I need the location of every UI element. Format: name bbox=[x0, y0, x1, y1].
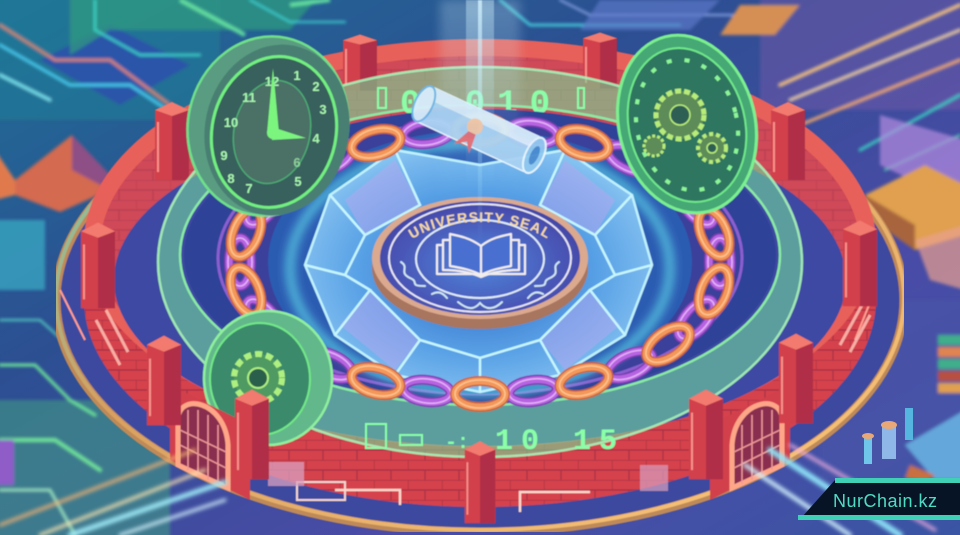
front wall pillars and gates bbox=[147, 334, 813, 523]
seal lettering: UNIVERSITY SEAL bbox=[407, 211, 548, 239]
clock numerals: 5 bbox=[294, 174, 302, 189]
light streams bottom right bbox=[745, 445, 935, 535]
watermark badge bbox=[798, 478, 960, 520]
red fortress wall bbox=[60, 39, 876, 512]
green translucent ring bbox=[158, 67, 802, 457]
diploma scroll bbox=[405, 83, 551, 183]
clock numerals: 7 bbox=[245, 181, 253, 196]
back wall pillars bbox=[81, 32, 877, 308]
clock numerals: 9 bbox=[220, 148, 228, 163]
disc: gears right bbox=[599, 20, 775, 228]
watermark badge: NurChain.kz bbox=[833, 491, 938, 511]
university seal bbox=[371, 196, 589, 330]
clock numerals: 1 bbox=[293, 68, 301, 83]
clock numerals: 12 bbox=[265, 74, 279, 89]
binary digits back: 0 010 bbox=[400, 86, 562, 124]
binary digits front: 10 15 bbox=[495, 425, 625, 459]
gear icon bbox=[234, 354, 282, 402]
clock numerals: 4 bbox=[312, 131, 320, 146]
clock numerals: 10 bbox=[224, 115, 238, 130]
seal ornaments bbox=[401, 262, 559, 308]
gold outer ring bbox=[56, 66, 904, 532]
open book icon bbox=[437, 234, 525, 277]
binary digits front bbox=[366, 424, 625, 459]
clock numerals bbox=[220, 68, 327, 196]
binary digits front: -: bbox=[445, 432, 469, 455]
gate left bbox=[170, 385, 250, 500]
light streams bottom left bbox=[0, 450, 225, 535]
crystal bowl bbox=[305, 150, 652, 392]
chain ring bbox=[223, 116, 737, 408]
disc: gear lower left bbox=[204, 311, 332, 445]
inner floor and neon rings bbox=[184, 109, 776, 401]
clock numerals: 3 bbox=[319, 102, 327, 117]
clock numerals: 6 bbox=[293, 155, 301, 170]
data cylinders bbox=[862, 408, 913, 464]
light beam bbox=[440, 0, 520, 240]
gear icons bbox=[644, 91, 726, 162]
disc: clock bbox=[171, 21, 365, 231]
clock numerals: 8 bbox=[227, 171, 235, 186]
clock numerals: 2 bbox=[312, 79, 320, 94]
clock hands bbox=[267, 68, 306, 140]
clock numerals: 11 bbox=[242, 90, 256, 105]
gate right bbox=[710, 385, 790, 500]
